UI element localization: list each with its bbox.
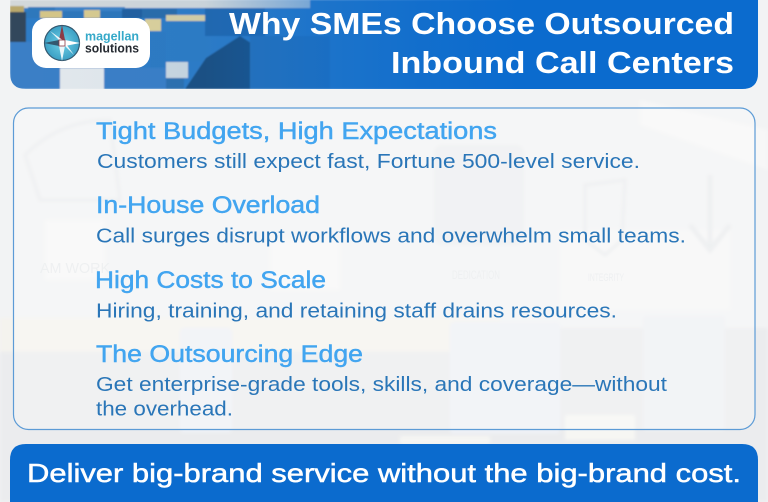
reason: in-house overload	[96, 192, 686, 248]
reason: in-house overload: Call surges disrupt workflows and overwhelm small teams.	[96, 226, 686, 248]
panel: reasons	[14, 108, 755, 430]
reason: outsourcing edge	[96, 341, 667, 420]
reason: outsourcing edge: Get enterprise-grade tools, skills, and coverage—without	[96, 374, 667, 396]
header title: Why SMEs Choose Outsourced	[229, 6, 734, 41]
logo wordmark	[85, 30, 139, 56]
icon: compass	[44, 25, 80, 61]
reason: tight budgets: Customers still expect fast, Fortune 500-level service.	[97, 151, 640, 173]
faded wall words: INTEGRITY	[588, 272, 624, 284]
reason: high costs	[95, 267, 617, 322]
reason: tight budgets	[96, 118, 640, 173]
reason: high costs: High Costs to Scale	[95, 267, 326, 294]
faded wall words	[40, 260, 624, 284]
reason: high costs: Hiring, training, and retaining staff drains resources.	[96, 300, 617, 322]
footer banner	[10, 444, 758, 502]
reason: in-house overload: In-House Overload	[96, 192, 320, 219]
reason: outsourcing edge: The Outsourcing Edge	[96, 341, 363, 368]
header banner	[10, 0, 758, 89]
logo wordmark: solutions	[85, 42, 139, 56]
header office photo	[10, 0, 758, 89]
reason: tight budgets: Tight Budgets, High Expectations	[96, 118, 497, 145]
faded wall words: AM WORK	[40, 260, 110, 277]
footer message: Deliver big-brand service without the big-brand cost.	[27, 458, 741, 488]
logo badge	[32, 18, 150, 68]
faded wall words: DEDICATION	[452, 268, 500, 282]
reason: outsourcing edge: the overhead.	[96, 398, 233, 420]
header title: Inbound Call Centers	[391, 45, 734, 80]
header title	[229, 6, 734, 80]
logo wordmark: magellan	[85, 30, 139, 44]
